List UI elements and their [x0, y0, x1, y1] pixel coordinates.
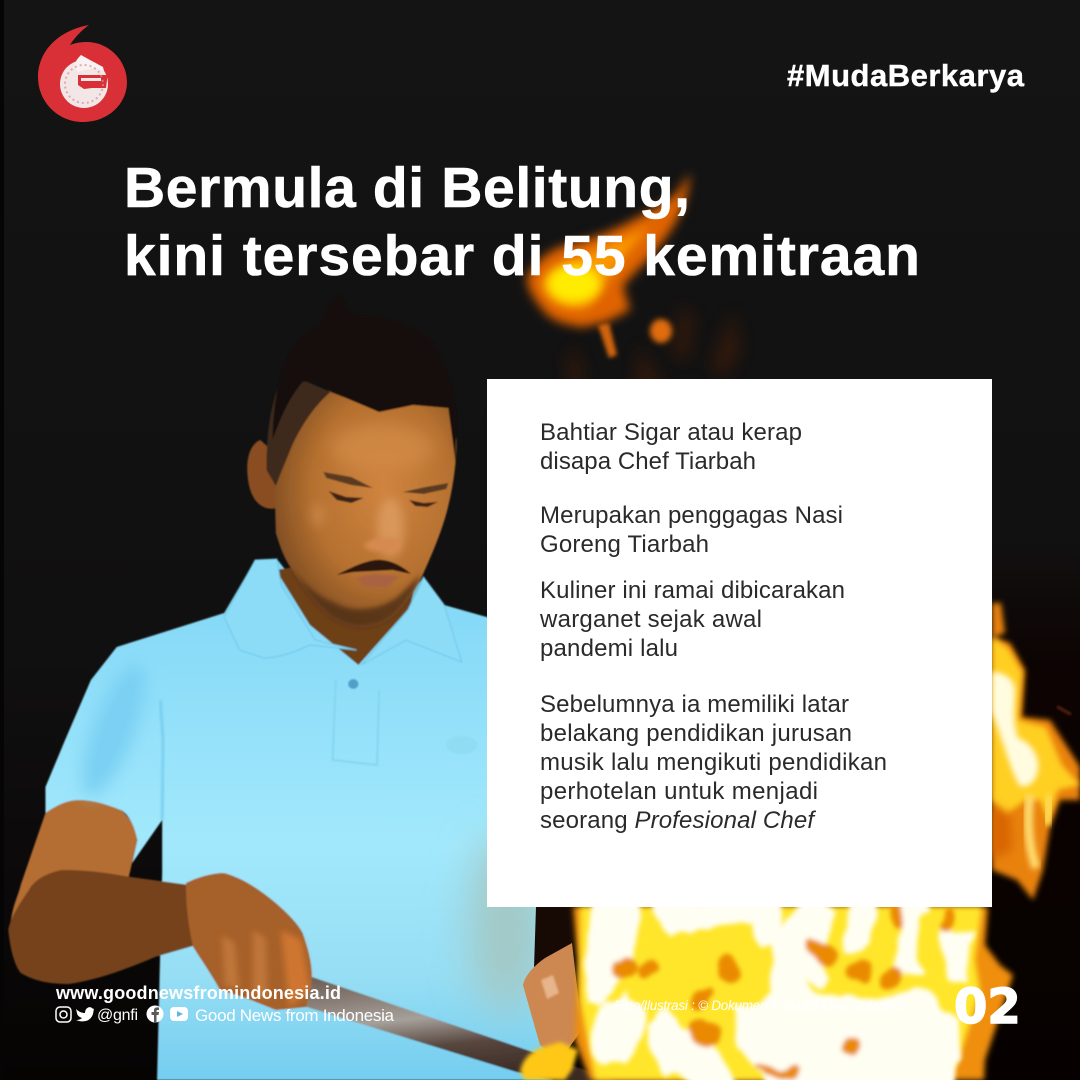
text block: latar belakang: musik lalu mengikuti pendidikan — [540, 749, 887, 776]
text block: nasi goreng: Goreng Tiarbah — [540, 531, 709, 558]
arm: upper arm — [10, 800, 137, 940]
handle: @gnfi — [97, 1007, 138, 1024]
icon: instagram — [56, 1007, 71, 1022]
website: www.goodnewsfromindonesia.id — [55, 983, 341, 1003]
icon: facebook — [146, 1006, 164, 1023]
mouth — [355, 574, 400, 587]
face — [274, 390, 457, 627]
left flame lick — [520, 1042, 578, 1080]
man — [8, 293, 620, 1080]
text block: intro: disapa Chef Tiarbah — [540, 448, 756, 475]
flame: bottom — [520, 890, 1013, 1080]
yellow body — [580, 907, 982, 1080]
rod — [307, 977, 620, 1080]
text block: kuliner — [539, 577, 845, 662]
title — [124, 156, 920, 288]
brand name: Good News from Indonesia — [195, 1006, 395, 1025]
text block: intro — [540, 419, 802, 475]
beard shadow — [292, 570, 420, 627]
shirt — [45, 559, 558, 1080]
text block: latar belakang — [540, 691, 887, 834]
logo — [38, 25, 127, 122]
title: Bermula di Belitung, — [124, 156, 690, 220]
mustache — [337, 560, 411, 575]
icon: youtube — [170, 1007, 188, 1021]
text block: kuliner: warganet sejak awal — [539, 606, 762, 633]
page number: 02 — [954, 979, 1021, 1035]
nose — [364, 537, 401, 552]
panel: text card — [487, 379, 992, 907]
text block: latar belakang: belakang pendidikan jurusan — [540, 720, 852, 747]
eyes — [328, 491, 364, 503]
text block: latar belakang: Sebelumnya ia memiliki latar — [540, 691, 849, 718]
hashtag: #MudaBerkarya — [787, 58, 1025, 93]
social row — [56, 1006, 395, 1025]
collar — [224, 559, 462, 665]
text block: nasi goreng — [540, 502, 843, 558]
flame: right — [992, 603, 1080, 900]
hair — [273, 293, 457, 462]
photo credit: Foto/Ilustrasi : © Dokumen Pribadi/Maya Stolastika — [614, 998, 906, 1013]
flame details — [585, 890, 975, 1080]
text block: intro: Bahtiar Sigar atau kerap — [540, 419, 802, 446]
text block: kuliner: pandemi lalu — [540, 635, 678, 662]
side fade — [267, 380, 331, 486]
eyebrows — [323, 472, 373, 488]
hand — [186, 873, 312, 1010]
icon: twitter — [76, 1007, 94, 1021]
text block: kuliner: Kuliner ini ramai dibicarakan — [540, 577, 845, 604]
arm: forearm — [8, 870, 196, 984]
flame: top — [527, 173, 741, 390]
text block: nasi goreng: Merupakan penggagas Nasi — [540, 502, 843, 529]
outer flame — [573, 907, 1013, 1080]
dark gap behind flame — [534, 907, 578, 968]
ear — [247, 440, 277, 509]
title: kini tersebar di 55 kemitraan — [124, 224, 920, 288]
text block: latar belakang: seorang Profesional Chef — [540, 807, 816, 834]
right hand — [523, 943, 582, 1060]
neck — [276, 560, 418, 665]
text block: latar belakang: perhotelan untuk menjadi — [540, 778, 818, 805]
